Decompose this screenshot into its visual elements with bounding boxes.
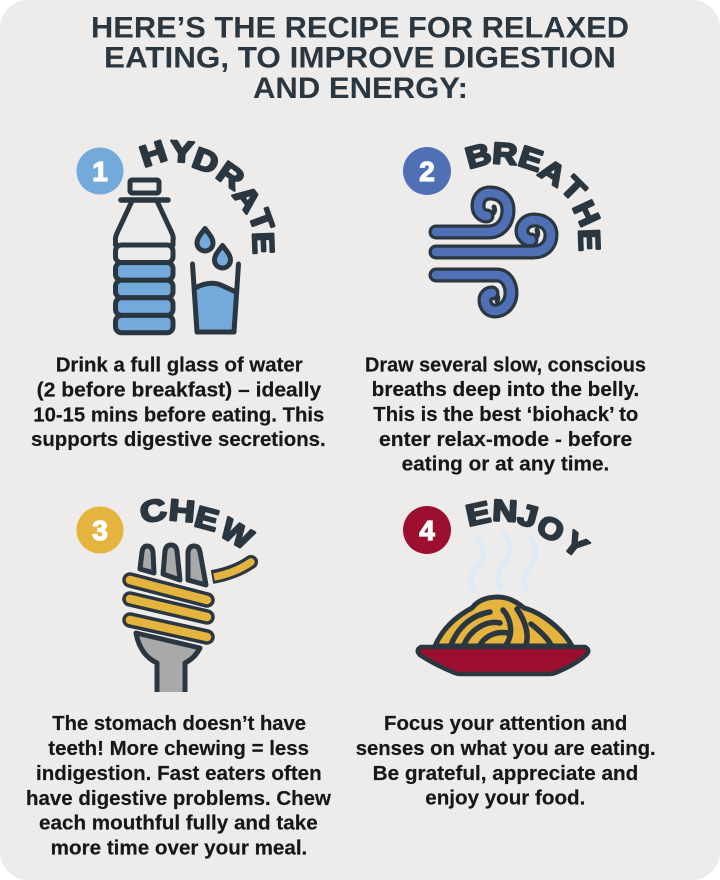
text block: chew: each mouthful fully and take bbox=[39, 811, 318, 834]
curved heading: chew: W bbox=[215, 511, 259, 556]
text block: hydrate: (2 before breakfast) – ideally bbox=[37, 378, 322, 402]
text block: breathe: breaths deep into the belly. bbox=[372, 378, 639, 401]
curved heading: breathe bbox=[462, 136, 607, 252]
text block: hydrate: supports digestive secretions. bbox=[31, 428, 326, 451]
curved heading: breathe: T bbox=[554, 169, 593, 208]
icon: water drops bbox=[197, 228, 230, 268]
text block: chew: teeth! More chewing = less bbox=[48, 737, 309, 760]
title bbox=[91, 12, 629, 105]
number badge 3: 3 bbox=[92, 515, 108, 546]
number badge 2 bbox=[403, 147, 451, 195]
icon: glass of water bbox=[192, 264, 238, 332]
text block: enjoy bbox=[356, 712, 656, 810]
text block: chew: have digestive problems. Chew bbox=[26, 787, 331, 810]
icon: pasta mound bbox=[435, 597, 572, 646]
curved heading: chew bbox=[137, 492, 259, 556]
curved heading: breathe: H bbox=[566, 195, 607, 231]
curved heading: breathe: A bbox=[533, 152, 572, 193]
panel: hydrate bbox=[76, 134, 281, 333]
text block: enjoy: enjoy your food. bbox=[425, 786, 585, 810]
curved heading: enjoy: E bbox=[463, 496, 494, 533]
curved heading: hydrate: D bbox=[188, 141, 223, 181]
curved heading: breathe: E bbox=[572, 228, 607, 252]
curved heading: enjoy: O bbox=[531, 507, 570, 550]
icon: plate bbox=[418, 647, 588, 674]
curved heading: breathe: B bbox=[462, 136, 495, 175]
curved heading: hydrate: T bbox=[242, 205, 281, 236]
number badge 4 bbox=[403, 506, 451, 554]
text block: breathe: Draw several slow, conscious bbox=[365, 354, 646, 376]
curved heading: hydrate: H bbox=[136, 134, 171, 174]
text block: enjoy: senses on what you are eating. bbox=[356, 737, 656, 760]
text block: hydrate: Drink a full glass of water bbox=[56, 354, 303, 376]
text block: chew: more time over your meal. bbox=[51, 836, 307, 859]
text block: hydrate: 10-15 mins before eating. This bbox=[33, 404, 324, 426]
title: HERE’S THE RECIPE FOR RELAXED bbox=[91, 12, 629, 44]
panel: chew bbox=[76, 492, 259, 692]
icon: water bottle bbox=[115, 180, 173, 333]
text block: breathe: eating or at any time. bbox=[402, 453, 609, 476]
curved heading: hydrate: A bbox=[227, 178, 268, 219]
curved heading: enjoy: N bbox=[492, 493, 518, 528]
curved heading: enjoy: Y bbox=[556, 524, 595, 565]
number badge 1 bbox=[76, 148, 124, 194]
icon: fork bbox=[136, 545, 206, 692]
curved heading: breathe: E bbox=[515, 139, 547, 178]
panel: breathe bbox=[403, 136, 607, 311]
curved heading: hydrate: R bbox=[211, 155, 250, 196]
text block: enjoy: Be grateful, appreciate and bbox=[373, 762, 638, 785]
curved heading: chew: C bbox=[137, 492, 170, 531]
icon: wind swirls bbox=[436, 193, 551, 311]
curved heading: chew: H bbox=[167, 494, 196, 529]
curved heading: hydrate: E bbox=[246, 231, 281, 255]
curved heading: enjoy bbox=[463, 493, 595, 565]
curved heading: chew: E bbox=[191, 500, 222, 538]
curved heading: enjoy: J bbox=[514, 497, 541, 534]
text block: enjoy: Focus your attention and bbox=[384, 712, 627, 735]
title: EATING, TO IMPROVE DIGESTION bbox=[104, 42, 616, 74]
curved heading: hydrate bbox=[136, 134, 281, 255]
title: AND ENERGY: bbox=[253, 72, 468, 105]
number badge 2: 2 bbox=[419, 156, 435, 187]
number badge 3 bbox=[76, 506, 124, 554]
number badge 1: 1 bbox=[92, 156, 108, 187]
icon: steam bbox=[471, 534, 536, 590]
number badge 4: 4 bbox=[419, 515, 435, 546]
text block: hydrate bbox=[31, 354, 326, 451]
text block: breathe: This is the best ‘biohack’ to bbox=[373, 403, 638, 426]
text block: chew: The stomach doesn’t have bbox=[52, 712, 306, 735]
icon: spaghetti strands bbox=[130, 555, 258, 637]
text block: breathe bbox=[365, 354, 646, 476]
curved heading: breathe: R bbox=[491, 136, 519, 171]
curved heading: hydrate: Y bbox=[169, 135, 195, 170]
text block: breathe: enter relax-mode - before bbox=[379, 428, 632, 451]
text block: chew: indigestion. Fast eaters often bbox=[36, 762, 322, 785]
text block: chew bbox=[26, 712, 331, 859]
panel: enjoy bbox=[403, 493, 595, 674]
